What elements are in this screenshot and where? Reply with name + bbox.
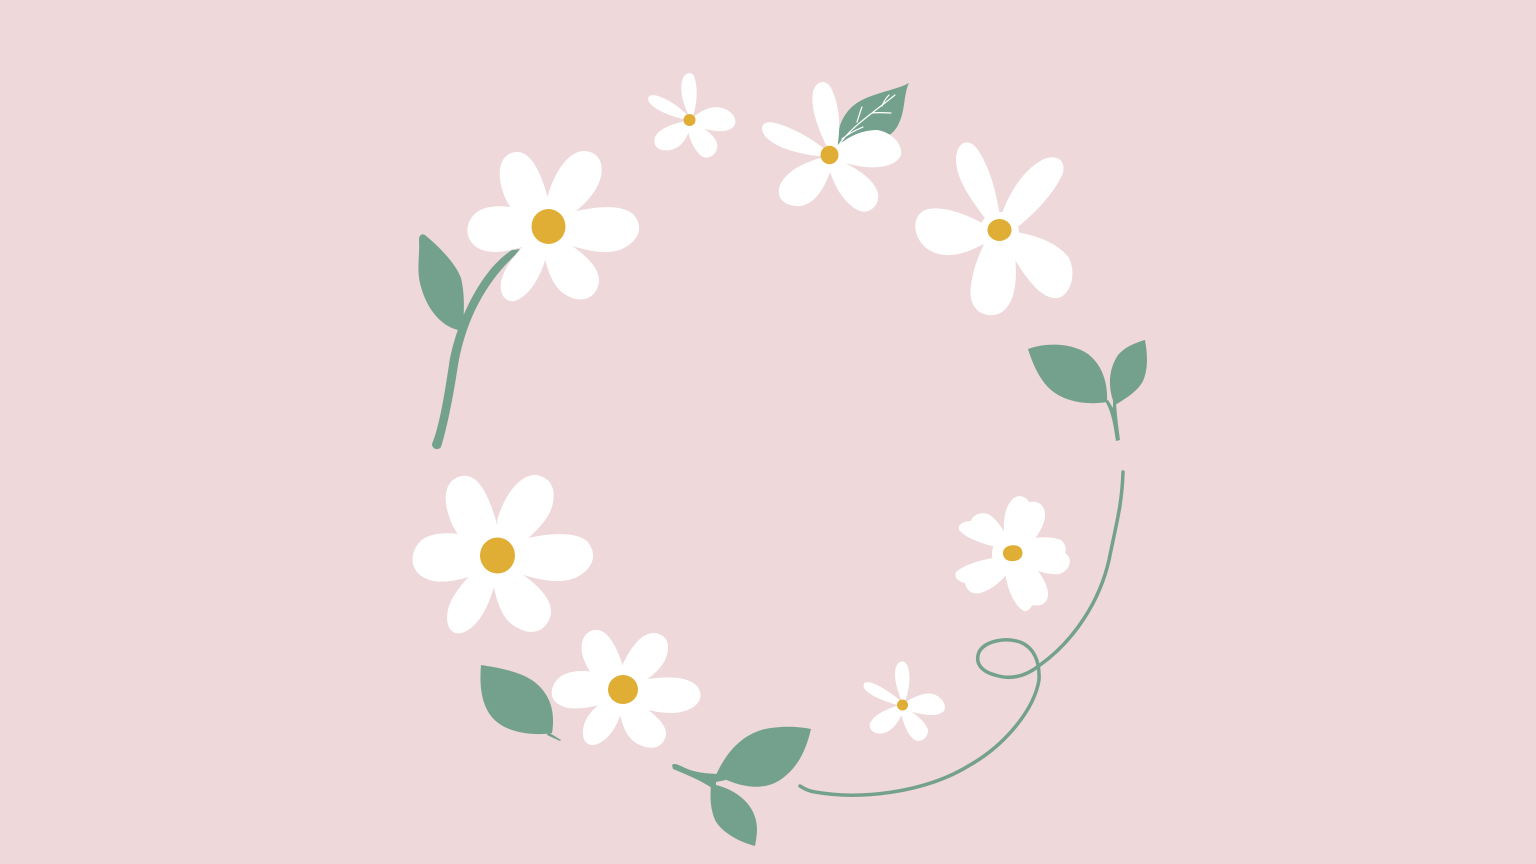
flower: small top bbox=[648, 73, 735, 158]
flower: top centre bbox=[762, 82, 901, 212]
stem and leaf, upper left bbox=[418, 234, 522, 449]
flower: lower left large bbox=[412, 475, 593, 633]
flower: lower centre bbox=[552, 630, 700, 748]
flower: upper right bbox=[915, 142, 1072, 315]
leaf, lower left bbox=[480, 665, 561, 741]
flower: irregular right bbox=[955, 496, 1070, 611]
leaf sprig, bottom centre bbox=[672, 727, 811, 846]
leaf sprig, right bbox=[1028, 340, 1147, 441]
curling vine, lower right bbox=[800, 472, 1123, 795]
leaf behind top flower bbox=[838, 83, 909, 146]
flower: upper left bbox=[467, 151, 639, 301]
flower: small lower right bbox=[864, 661, 945, 741]
